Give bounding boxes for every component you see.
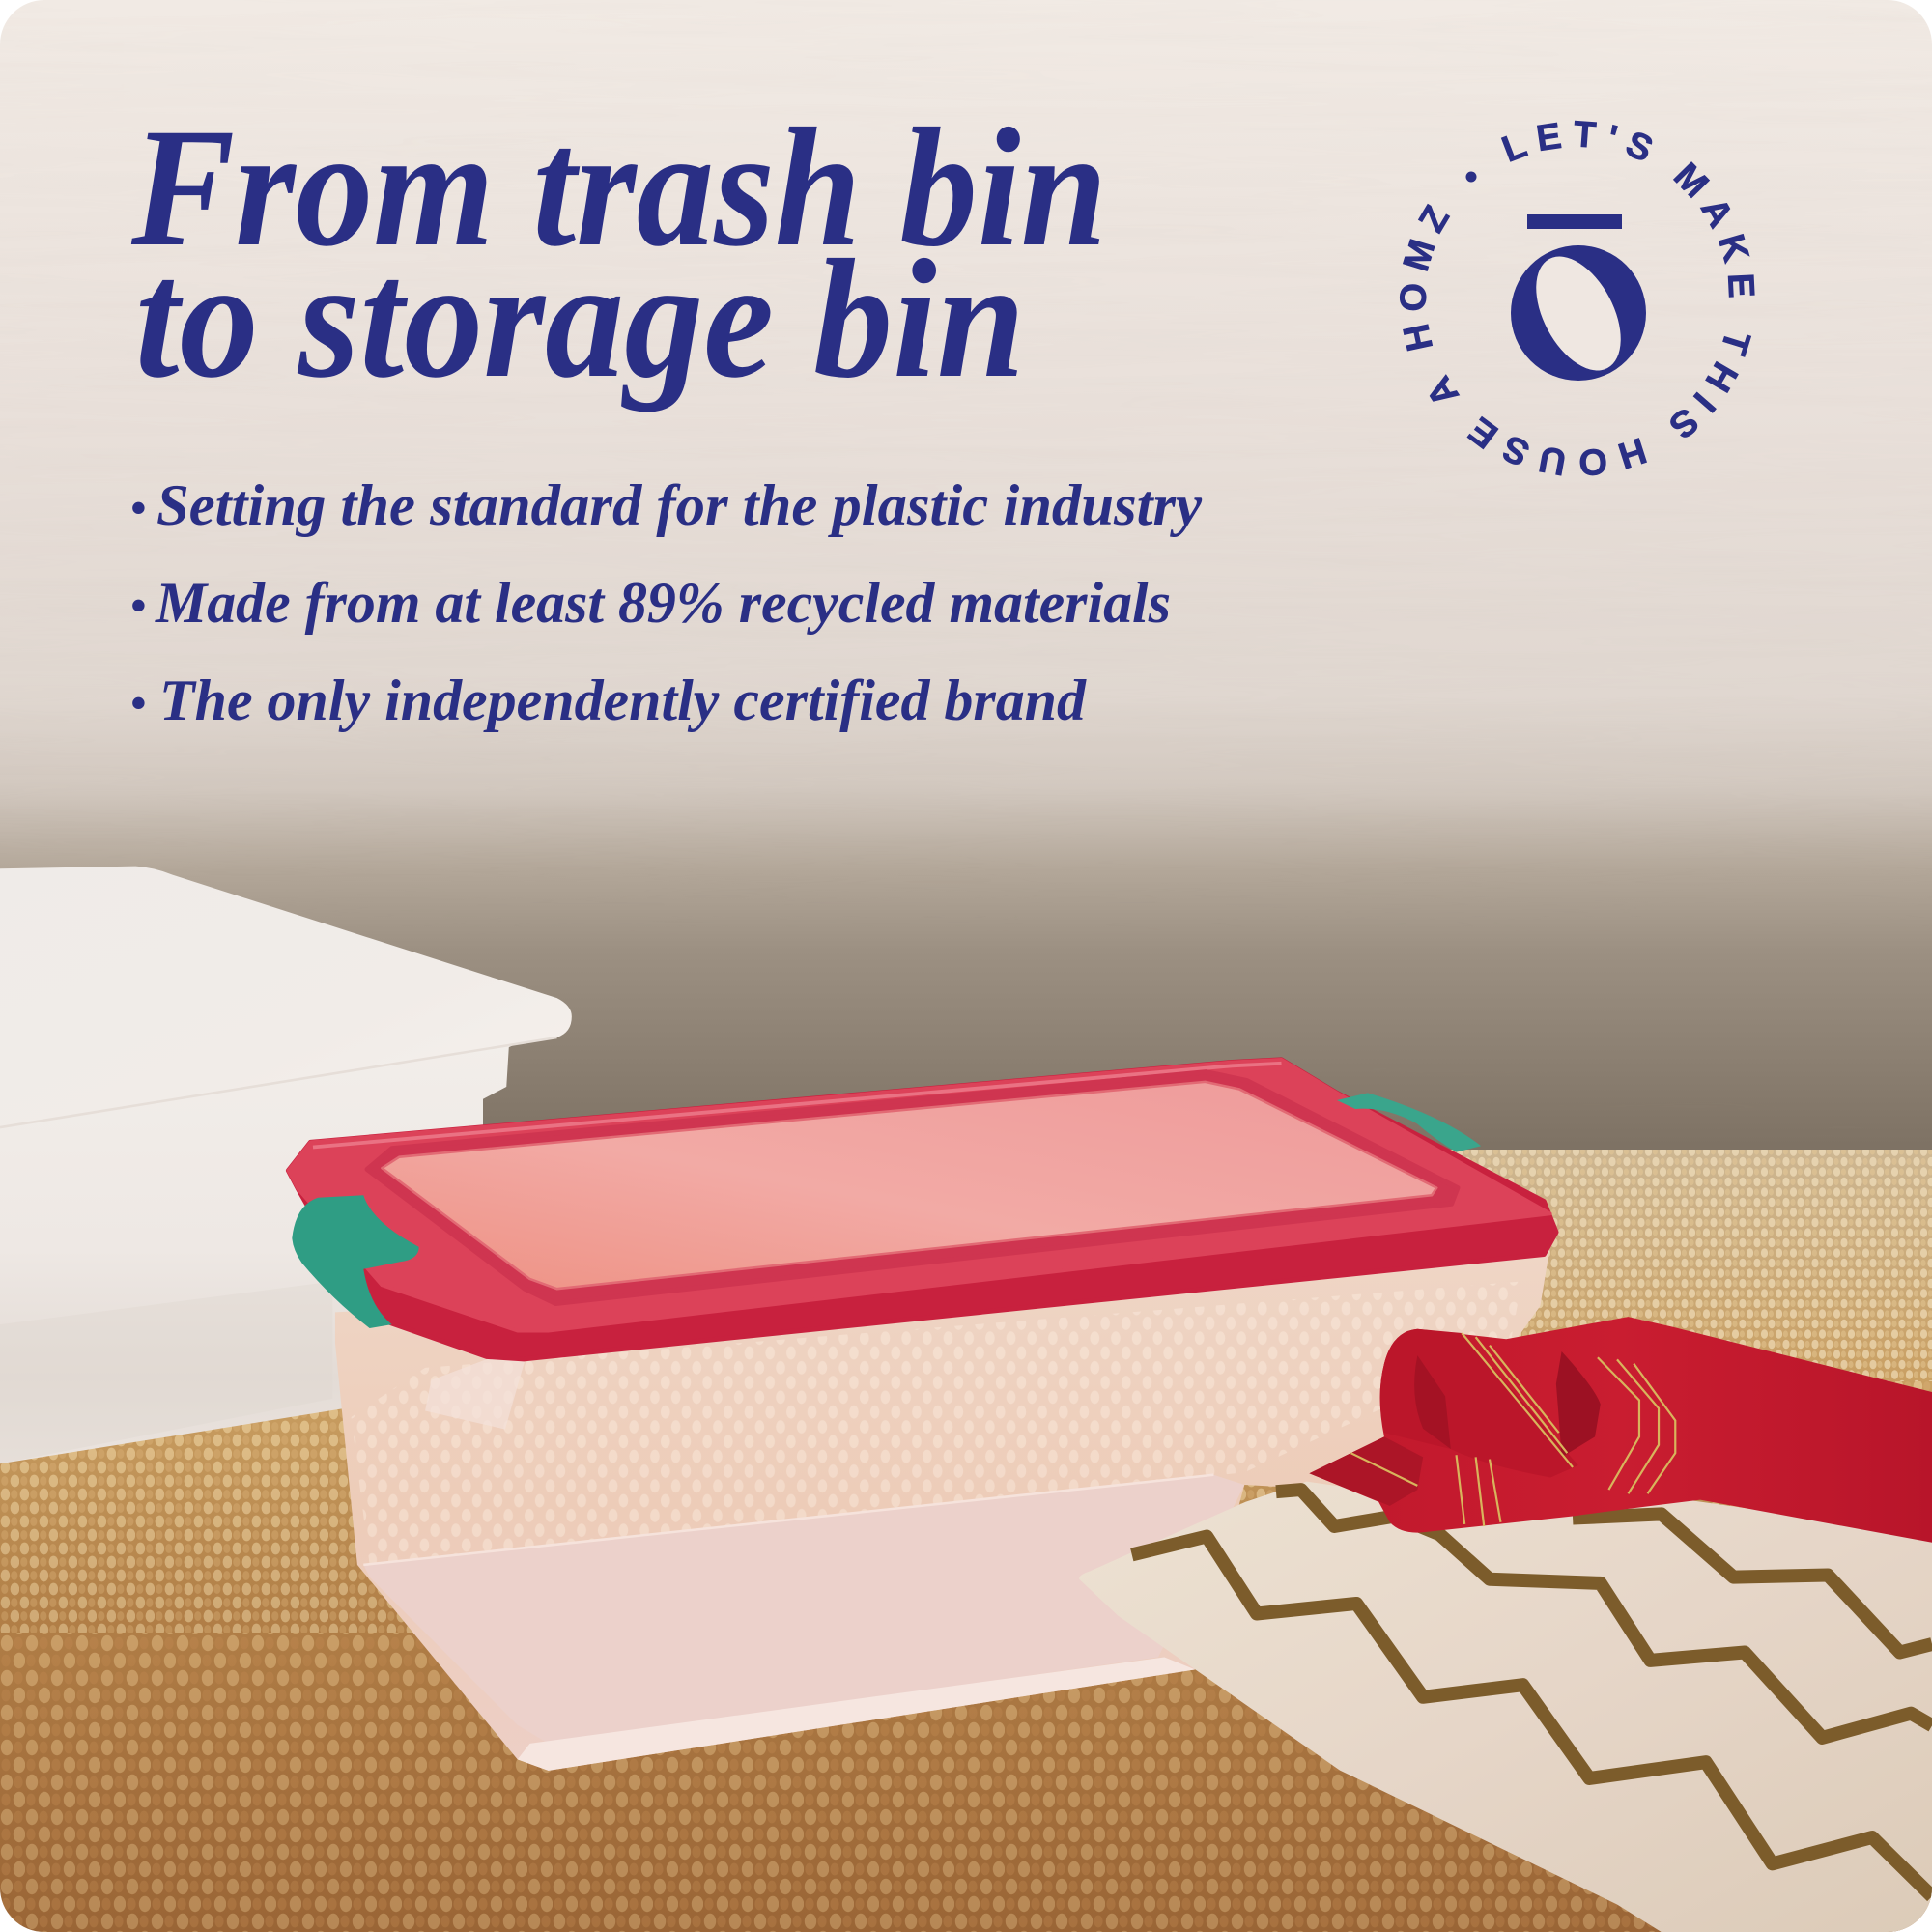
right teal handle <box>1337 1093 1481 1152</box>
clear box body <box>335 1247 1550 1771</box>
bullet 1: Setting the standard for the plastic industry <box>156 473 1202 537</box>
o-macron mark <box>1511 214 1646 384</box>
background wall <box>0 0 1932 1159</box>
red lid <box>288 1060 1556 1359</box>
bullet 3: • <box>130 678 146 727</box>
red napkin with gold stripes <box>1309 1317 1932 1543</box>
title <box>131 126 1099 412</box>
clear storage box with red lid <box>288 1060 1556 1771</box>
bullet 1: • <box>130 483 146 532</box>
left teal handle <box>292 1195 419 1328</box>
slogan dot <box>1466 172 1476 182</box>
bullet 2: • <box>130 581 146 630</box>
title: to storage bin <box>135 225 1025 413</box>
bullet 2: Made from at least 89% recycled materials <box>155 571 1171 635</box>
circular slogan: LET'S MAKE THIS HOUSE A HOMZ <box>1399 120 1755 476</box>
bullet 3: The only independently certified brand <box>159 668 1087 732</box>
woven rug <box>0 1150 1932 1932</box>
white storage bin, background left <box>0 867 572 1463</box>
bullet list <box>130 473 1202 732</box>
cream pillow with gold zigzag <box>1079 1482 1932 1932</box>
title: From trash bin <box>130 94 1107 282</box>
logo badge <box>1399 120 1755 476</box>
